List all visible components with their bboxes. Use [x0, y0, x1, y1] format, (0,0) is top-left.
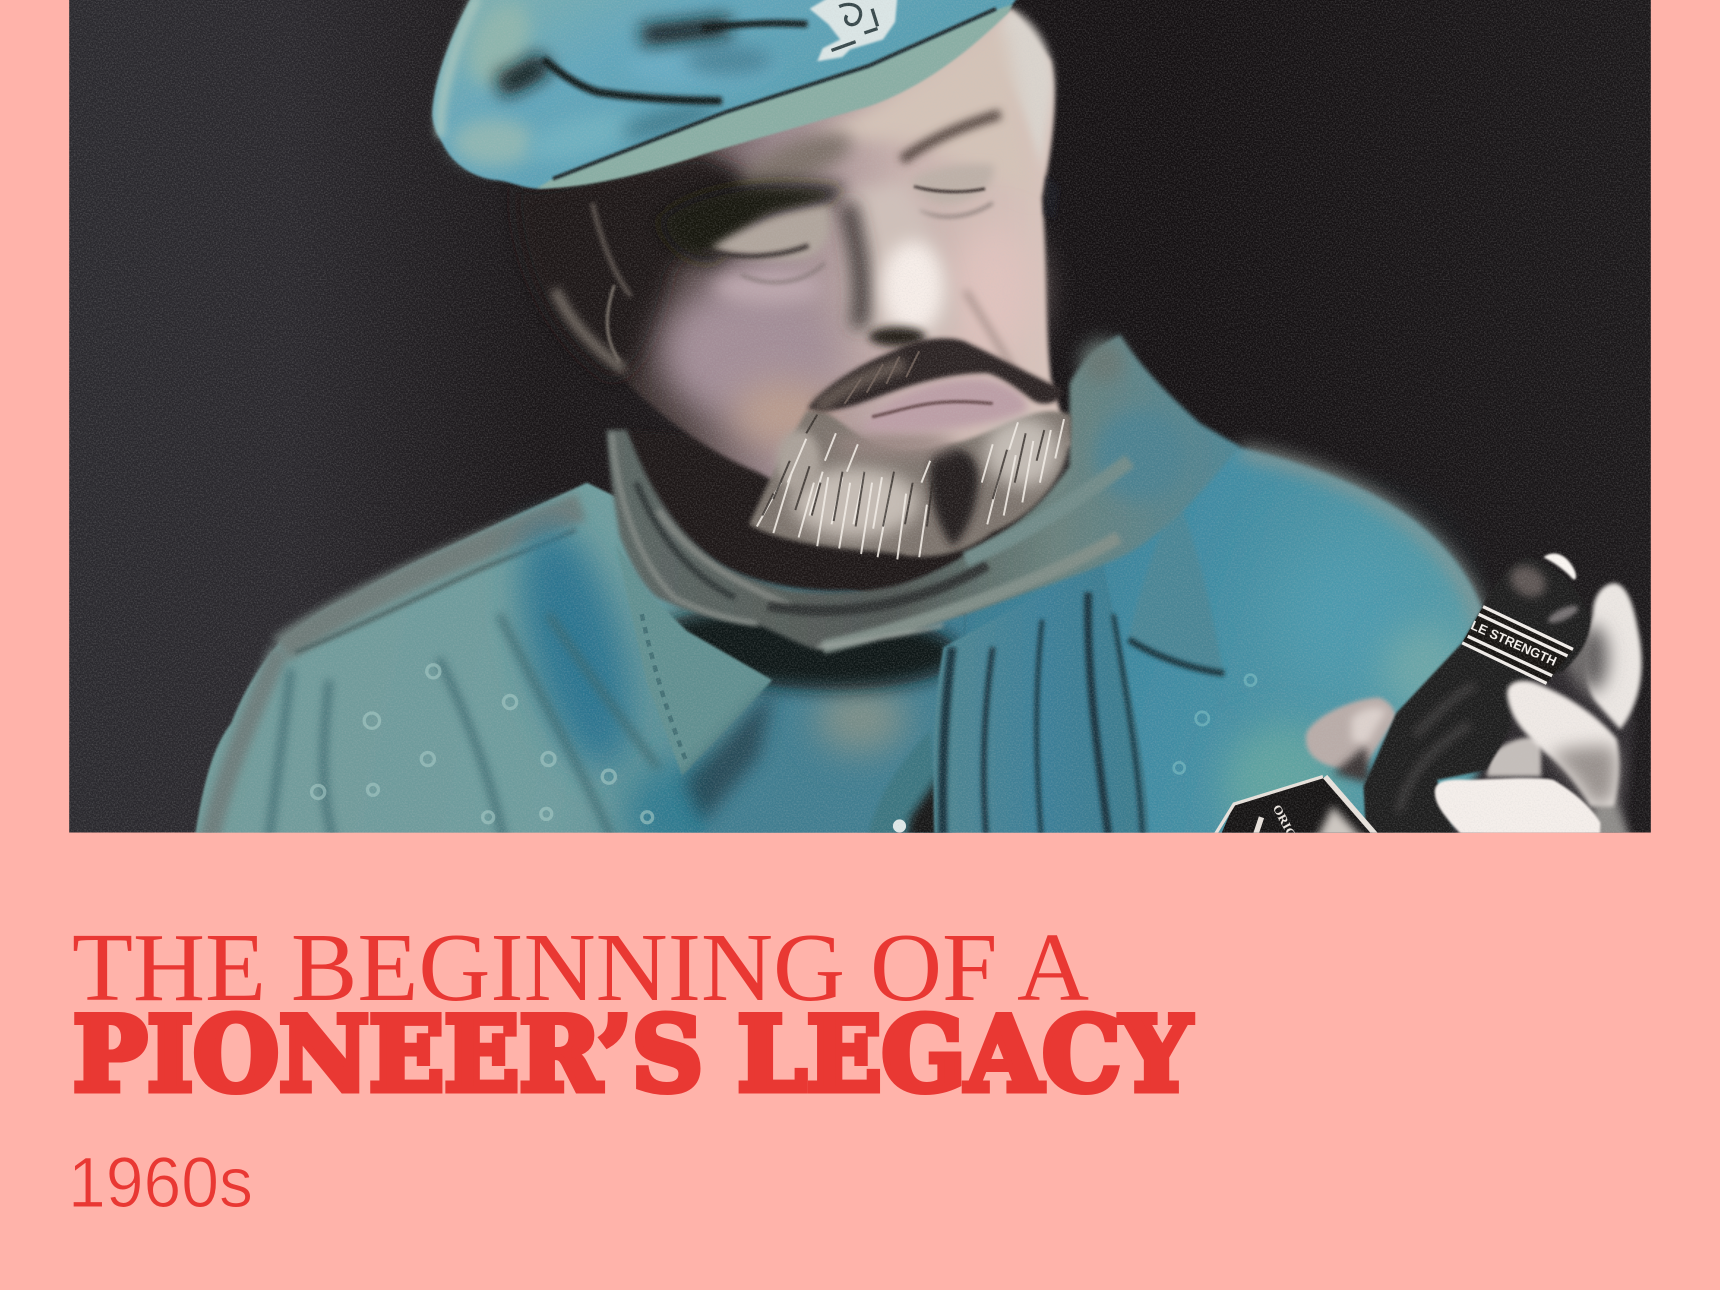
beard and goatee [749, 411, 1071, 559]
nose [846, 181, 1018, 378]
upper cigar band: LE STRENGTH [1469, 618, 1559, 669]
face [515, 9, 1070, 554]
title line two: PIONEER’S LEGACY [73, 995, 1192, 1115]
index finger [1585, 583, 1642, 729]
scarf wrapped around neck [607, 335, 1240, 649]
cap folds [499, 23, 807, 101]
right eye socket [902, 114, 1000, 217]
shadow under cap and ear [544, 150, 762, 379]
mouth [861, 378, 1027, 432]
thumb [1306, 698, 1396, 773]
lower cigar band [1214, 777, 1388, 850]
shadow under the scarf [651, 598, 962, 697]
lit forehead [812, 22, 1037, 197]
moustache [807, 338, 1062, 411]
shirt placket [868, 734, 941, 833]
photo grain [69, 0, 1651, 833]
cap badge [810, 0, 897, 61]
lower cigar band: ORIGI [1270, 802, 1302, 846]
chest opening and shirt front [702, 684, 946, 833]
fingertip behind cigar [1543, 554, 1576, 580]
shirt collar [615, 543, 774, 823]
palm in shadow [1437, 647, 1634, 850]
scarf hanging down the chest [933, 559, 1150, 850]
title line one: THE BEGINNING OF A [72, 914, 1089, 1022]
shirt: right shoulder [943, 439, 1490, 850]
left eye socket [658, 182, 845, 282]
flat cap [432, 0, 1020, 189]
hand holding the cigar [1306, 554, 1642, 850]
cigar [1214, 556, 1591, 850]
shirt pocket flap [1131, 514, 1222, 668]
beard hair strands [757, 419, 1064, 559]
upper cigar band [1462, 607, 1573, 683]
cheeks [660, 283, 831, 419]
shirt rosette pattern [310, 663, 654, 824]
photo backdrop [69, 0, 1651, 833]
decade label: 1960s [68, 1144, 253, 1223]
cap brim [536, 4, 1012, 189]
shirt: left shoulder and sleeve [193, 483, 965, 867]
hair at temple [993, 9, 1052, 170]
photo: portrait of a man in a blue cap examining a cigar [69, 0, 1651, 867]
fingers in front of the cigar [1435, 681, 1619, 850]
